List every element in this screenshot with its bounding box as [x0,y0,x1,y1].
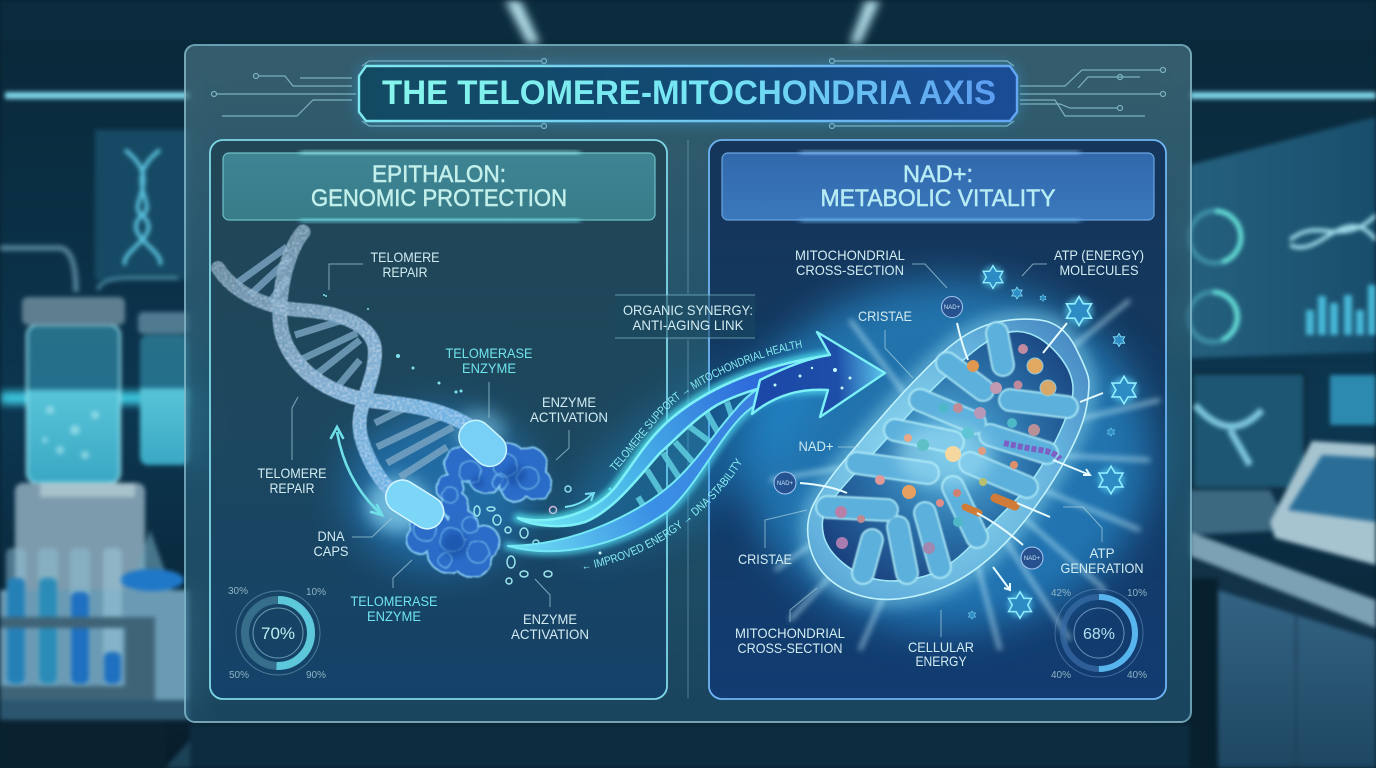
label: ATP generation: GENERATION [1060,560,1144,576]
label: telomerase enzyme upper [446,345,532,418]
label: mitochondrial cross-section lower [735,588,845,656]
gauge: 68%: 40% [1051,670,1071,681]
arrow: small particle arrow [565,493,594,507]
label: DNA caps [314,518,392,559]
label: cellular energy [908,610,974,669]
label: telomere repair left: TELOMERE [258,465,326,481]
arrow: repair cycle [331,427,382,515]
gauge: 70%: 10% [306,587,326,598]
label: ATP energy molecules: ATP (ENERGY) [1054,247,1144,263]
label: NAD+: NAD+ [798,438,834,454]
label: mitochondrial cross-section top: CROSS-SECTION [796,262,904,278]
particles [323,294,612,584]
arrow: synergy DNA ribbon: TELOMERE SUPPORT → MITOCHONDRIAL HEALTH [609,340,802,470]
illustration: mitochondrion: NAD+ [777,481,794,487]
heading: NAD+: NAD+: [903,161,973,188]
heading: Epithalon: EPITHALON: [372,161,506,188]
label: enzyme activation upper [530,394,608,460]
label: telomerase enzyme lower [350,560,438,624]
gauge: 70%: 30% [228,586,248,597]
gauge: 68%: 68% [1083,626,1115,643]
illustration: mitochondrion: NAD+ [944,305,961,311]
label: telomere repair top: TELOMERE [370,249,440,265]
title banner [212,58,1166,128]
arrows: molecule flow [800,323,1103,590]
illustration: DNA helix with enzyme [218,232,612,584]
icon: telomerase enzyme blob [407,444,551,577]
label: telomere repair top [329,249,440,290]
arrow head [752,332,885,417]
gauge: 70%: 90% [306,670,326,681]
label: ATP generation [1060,507,1144,576]
label: cristae top [858,308,913,378]
label: cristae lower: CRISTAE [738,551,792,567]
label: DNA caps: CAPS [314,543,348,559]
label: enzyme activation lower: ENZYME [523,611,577,627]
label: cristae lower [738,510,807,567]
gauge: 70% [228,586,326,681]
upper strand band [518,355,830,526]
label: cellular energy: ENERGY [916,653,967,669]
label: telomerase enzyme lower: ENZYME [367,608,421,624]
label: NAD+ [798,438,860,454]
callout: organic synergy [615,295,755,338]
icon: DNA caps [380,414,513,535]
label: cristae top: CRISTAE [858,308,912,324]
curved text: telomere support [615,346,812,472]
icons: NAD molecules [774,296,1043,569]
heading: NAD+: METABOLIC VITALITY [820,185,1056,212]
gauge: 68%: 10% [1127,588,1147,599]
arrow: synergy DNA ribbon: ← IMPROVED ENERGY → DNA STABILITY [584,458,742,569]
gauge: 70%: 50% [229,670,249,681]
label: enzyme activation upper: ACTIVATION [530,409,608,425]
label: mitochondrial cross-section top [795,247,947,288]
label: ATP energy molecules [1022,247,1144,278]
gauge: 68%: 42% [1051,588,1071,599]
illustration: mitochondrion [742,266,1160,650]
frosted glass main panel [184,44,1192,723]
center divider line [687,140,689,698]
curved text: improved energy [582,448,750,570]
label: ATP energy molecules: MOLECULES [1060,262,1138,278]
label: telomerase enzyme upper: ENZYME [462,360,516,376]
label: DNA caps: DNA [318,528,345,544]
label: cellular energy: CELLULAR [908,639,974,655]
label: ATP generation: ATP [1090,545,1114,561]
label: telomere repair left: REPAIR [270,480,314,496]
label: mitochondrial cross-section lower: MITOCHONDRIAL [735,625,845,641]
label: telomerase enzyme lower: TELOMERASE [350,593,438,609]
label: enzyme activation upper: ENZYME [542,394,596,410]
title text: THE TELOMERE-MITOCHONDRIA AXIS [382,74,996,112]
callout: organic synergy: ORGANIC SYNERGY: [623,302,753,318]
illustration: mitochondrion: NAD+ [1024,556,1041,562]
label: telomere repair top: REPAIR [382,264,428,280]
panel: NAD+ metabolic vitality [709,140,1166,699]
callout: organic synergy: ANTI-AGING LINK [632,317,744,333]
gauge: 68%: 40% [1127,670,1147,681]
lower strand band [508,372,830,551]
label: mitochondrial cross-section top: MITOCHONDRIAL [795,247,905,263]
panel: Epithalon genomic protection [210,140,667,699]
icons: ATP stars [968,266,1137,619]
label: enzyme activation lower: ACTIVATION [511,626,589,642]
arrow: synergy DNA ribbon [500,330,886,569]
gauge: 70%: 70% [261,624,295,643]
label: mitochondrial cross-section lower: CROSS-SECTION [738,640,842,656]
label: telomere repair left [258,397,326,496]
gauge: 68% [1051,588,1147,681]
heading: Epithalon: GENOMIC PROTECTION [311,185,567,212]
label: enzyme activation lower [511,579,589,642]
label: telomerase enzyme upper: TELOMERASE [446,345,532,361]
